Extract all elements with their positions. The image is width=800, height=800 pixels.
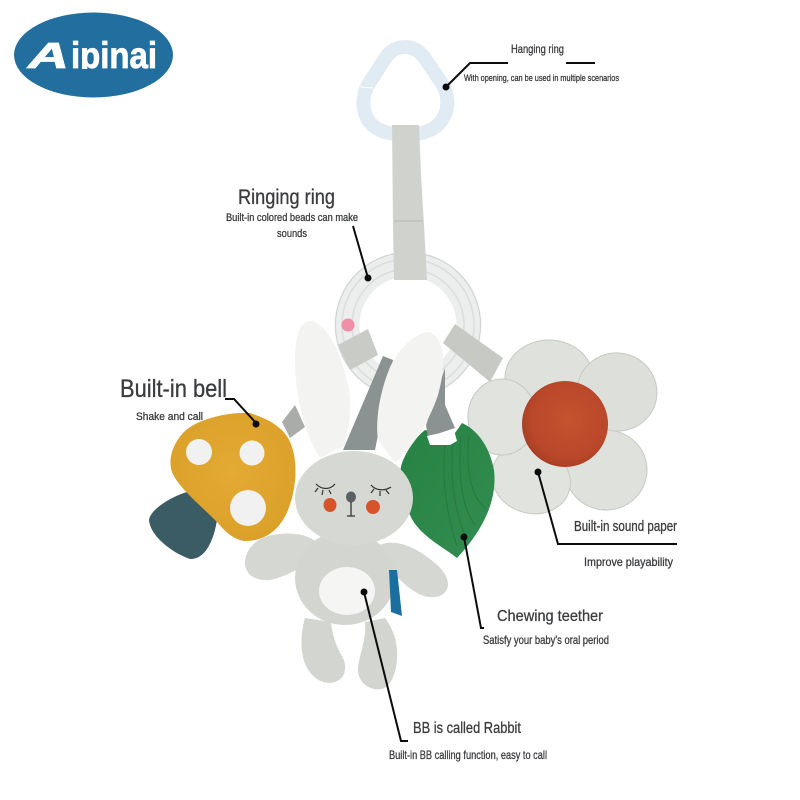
- fabric loops: [338, 324, 503, 382]
- tag: [389, 570, 402, 616]
- left arm: [245, 534, 318, 580]
- callout: hanging ring: [442, 42, 619, 90]
- petal: left: [468, 379, 536, 455]
- right cheek: [366, 500, 380, 514]
- ringing ring with beads: [336, 252, 480, 398]
- right ear: [377, 332, 443, 463]
- callout: ringing ring: [226, 186, 372, 282]
- right leg: [358, 618, 397, 689]
- logo: ipinai: [71, 35, 157, 76]
- callout: hanging ring: With opening, can be used in multiple scenarios: [464, 73, 619, 83]
- body: [295, 531, 395, 625]
- nose: [346, 492, 356, 502]
- callout: rabbit: BB is called Rabbit: [413, 720, 521, 737]
- petal: bottom right: [565, 430, 647, 510]
- clip: [282, 405, 305, 438]
- flower centre: [522, 381, 608, 467]
- left ear: [295, 321, 350, 458]
- callout: built-in bell: Shake and call: [136, 411, 203, 423]
- logo: [14, 12, 173, 98]
- cap: [170, 413, 295, 541]
- petal: right: [568, 344, 666, 440]
- mushroom toy: [149, 405, 305, 559]
- grey ribbon: left: [343, 356, 393, 450]
- pink bead: [342, 318, 354, 332]
- callout: ringing ring: sounds: [277, 228, 307, 240]
- callout: built-in bell: [120, 375, 260, 428]
- callout: chewing teether: Chewing teether: [497, 608, 604, 625]
- callout: ringing ring: Ringing ring: [238, 186, 335, 209]
- petal: bottom left: [482, 433, 580, 525]
- left eye: [315, 484, 335, 495]
- hanging ring: [360, 47, 447, 134]
- right eye: [371, 485, 391, 496]
- logo: A: [26, 35, 69, 76]
- belly: [319, 567, 375, 615]
- callout: built-in sound paper: Improve playability: [584, 555, 673, 569]
- left leg: [301, 618, 345, 683]
- callout: built-in sound paper: [534, 468, 677, 569]
- grey ribbon: right: [426, 368, 457, 445]
- callout: ringing ring: Built-in colored beads can make: [226, 212, 358, 224]
- flower toy: [468, 340, 666, 525]
- rabbit toy: [245, 321, 448, 689]
- callout: built-in sound paper: Built-in sound paper: [574, 519, 677, 535]
- teether leaf: [400, 423, 495, 558]
- callout: rabbit: Built-in BB calling function, easy to call: [389, 748, 547, 762]
- fabric strap: [392, 125, 427, 280]
- petal: top: [505, 340, 593, 416]
- right arm: [380, 543, 448, 597]
- mouth: [347, 502, 355, 516]
- head: [295, 451, 413, 545]
- stem: [149, 492, 217, 559]
- callout: chewing teether: Satisfy your baby's oral period: [483, 633, 609, 647]
- dots: [186, 439, 212, 465]
- left cheek: [324, 498, 336, 512]
- callout: hanging ring: Hanging ring: [511, 42, 564, 56]
- callout: chewing teether: [460, 534, 609, 647]
- callout: built-in bell: Built-in bell: [120, 375, 227, 403]
- callout: rabbit: [360, 588, 547, 762]
